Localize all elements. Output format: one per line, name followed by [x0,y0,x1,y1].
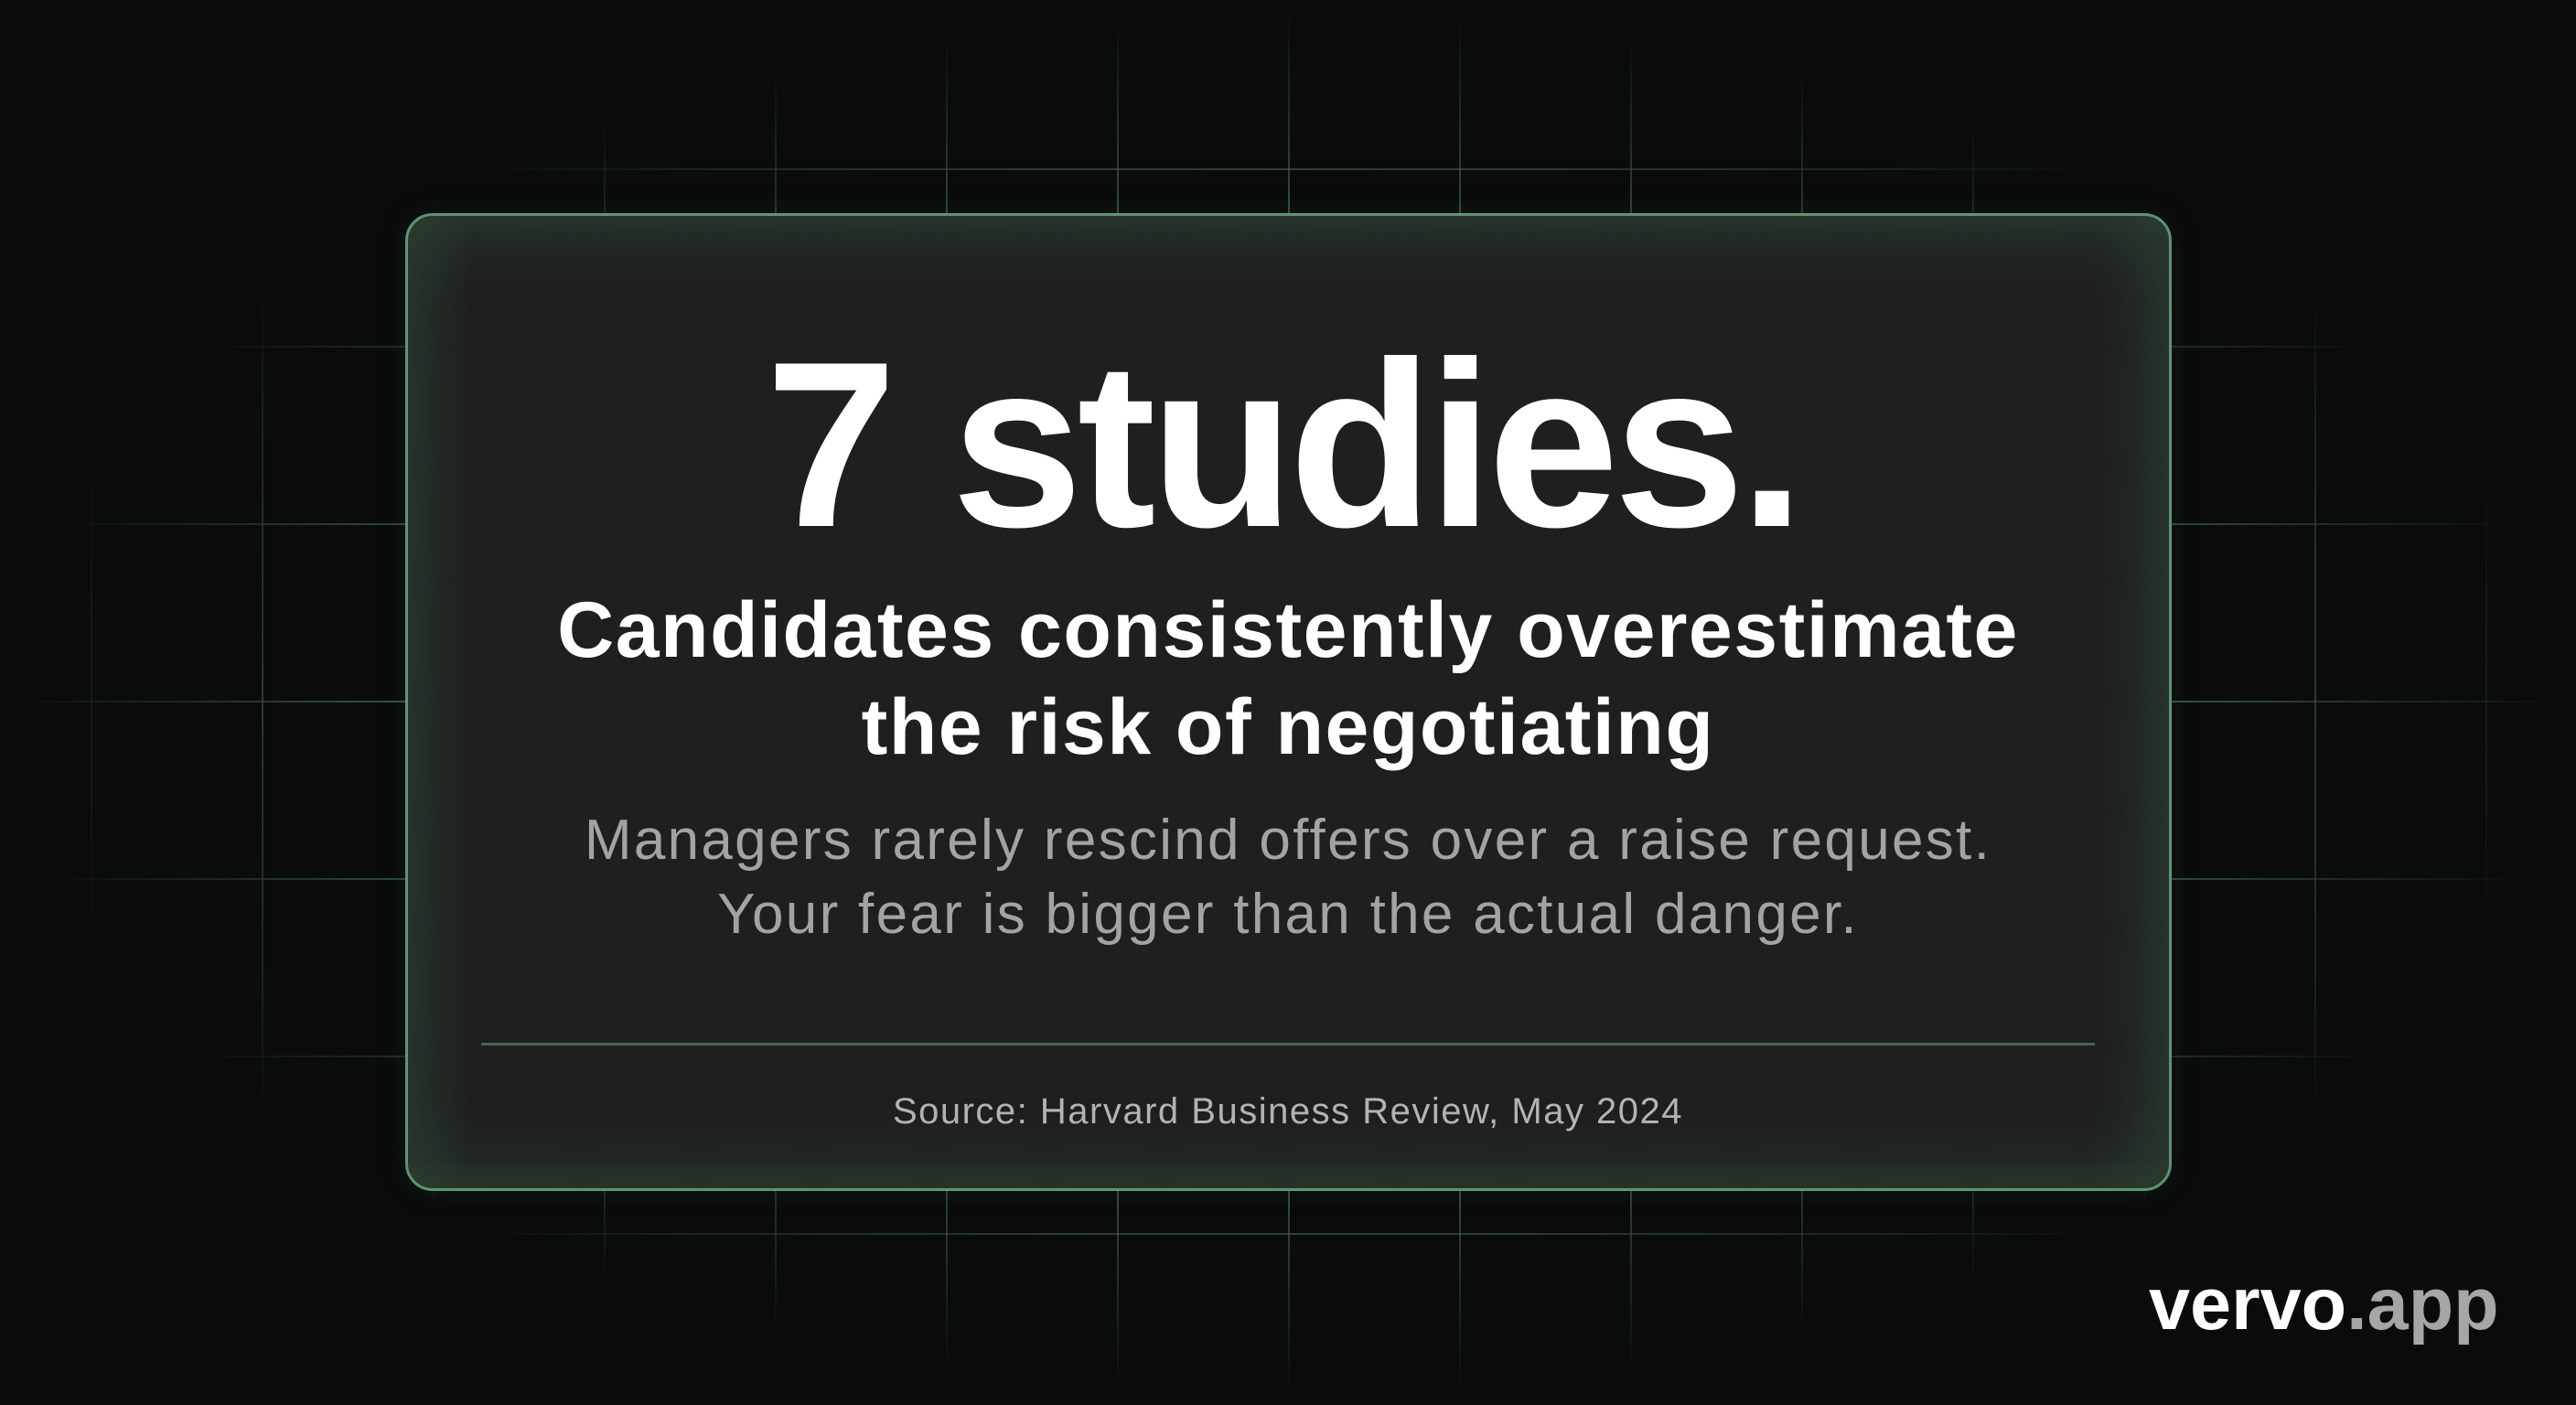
brand logo: vervo.app [2149,1263,2499,1346]
subtitle: the risk of negotiating [862,683,1714,771]
subtitle [557,586,2019,771]
title: 7 studies. [766,312,1799,576]
panel: stat card [405,213,2172,1191]
subtitle: Candidates consistently overestimate [557,586,2019,674]
body text: Managers rarely rescind offers over a raise request. [585,809,1991,872]
source: Source: Harvard Business Review, May 2024 [893,1091,1683,1132]
body text: Your fear is bigger than the actual danger. [717,883,1859,946]
body text [585,809,1991,946]
divider [481,1043,2095,1046]
